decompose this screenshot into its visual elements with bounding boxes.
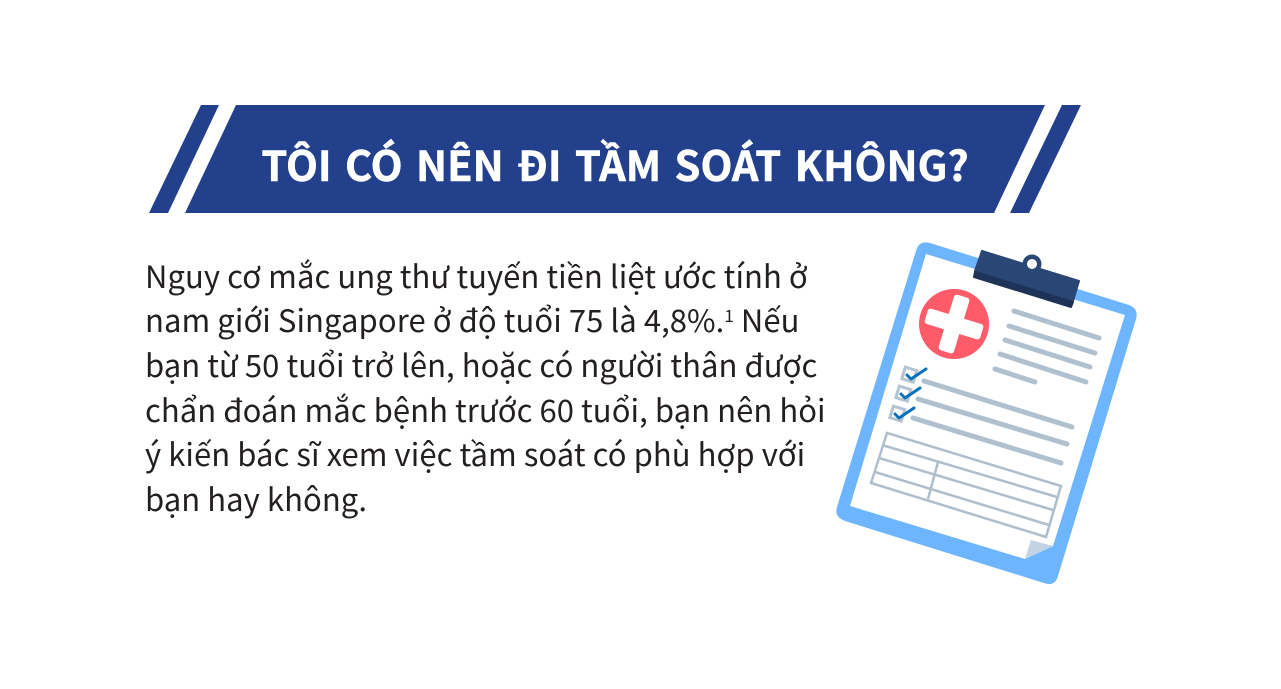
body text [145,252,826,520]
banner [149,105,1081,213]
body text: ý kiến bác sĩ xem việc tầm soát có phù hợp với [145,430,805,475]
text lines [913,311,1099,463]
clip [974,251,1079,307]
body text: bạn từ 50 tuổi trở lên, hoặc có người thân được [145,341,817,386]
clipboard board [836,242,1137,584]
body text: bạn hay không. [145,475,367,520]
body text: chẩn đoán mắc bệnh trước 60 tuổi, bạn nên hỏi [145,386,826,431]
checklist [890,367,926,421]
icon: medical cross [918,288,990,360]
table [871,433,1061,537]
title: TÔI CÓ NÊN ĐI TẦM SOÁT KHÔNG? [261,133,969,193]
body text: nam giới Singapore ở độ tuổi 75 là 4,8%.1 Nếu [145,296,800,341]
paper sheet [850,254,1125,559]
body text: Nguy cơ mắc ung thư tuyến tiền liệt ước tính ở [145,252,808,297]
page fold [1025,540,1053,559]
